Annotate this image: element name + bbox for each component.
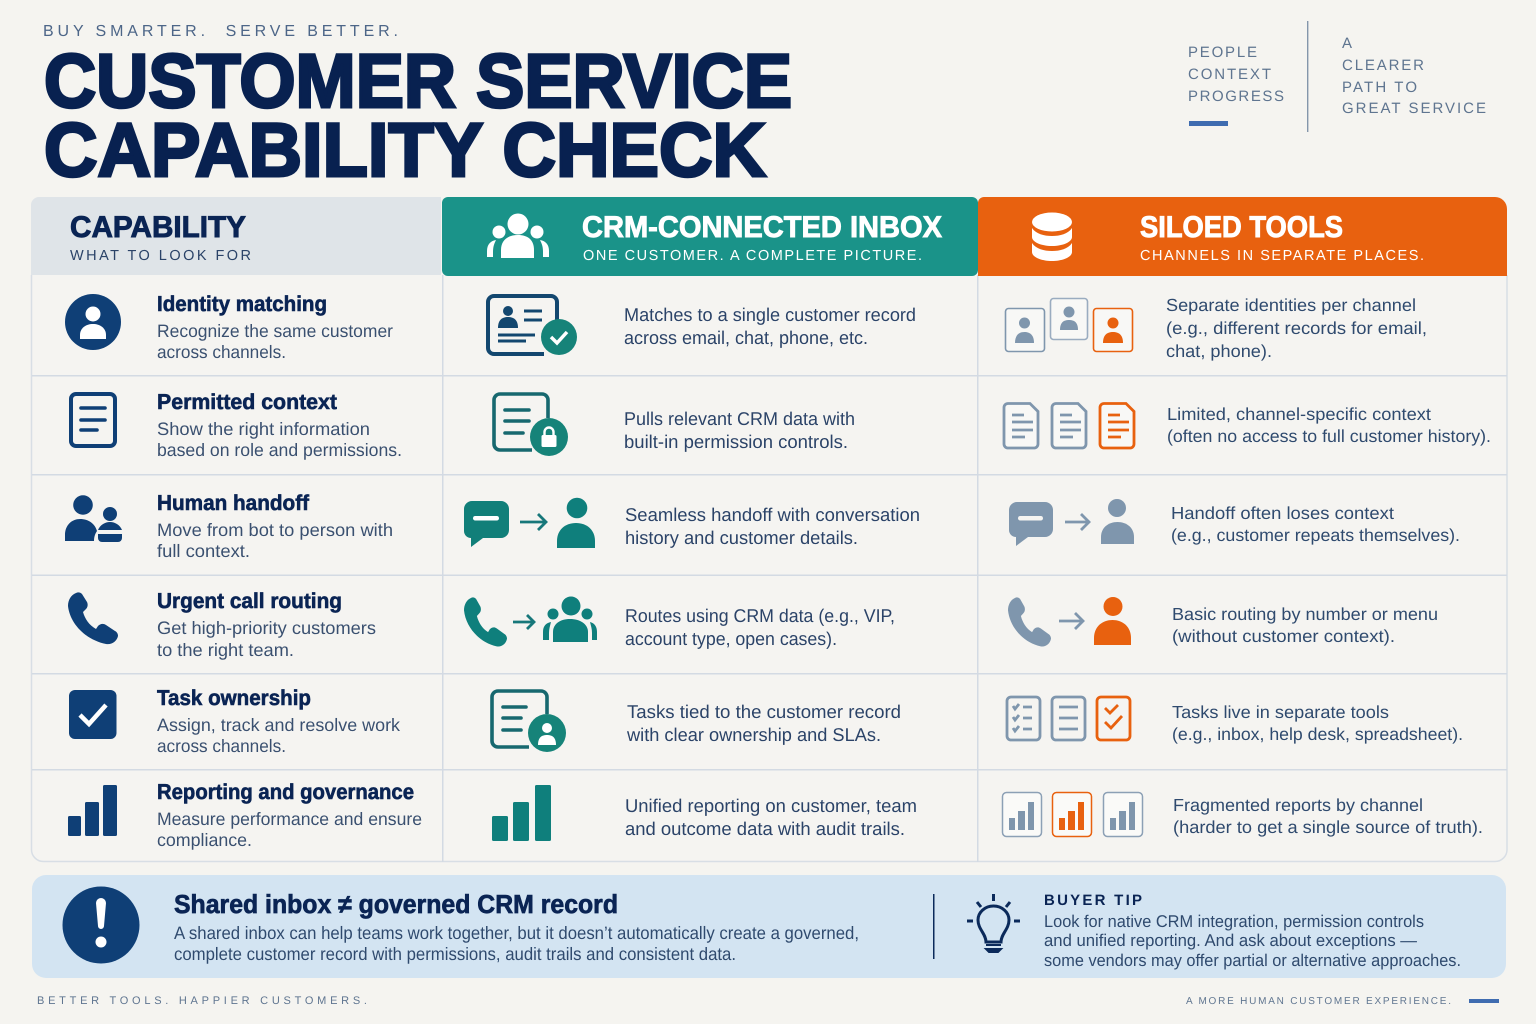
capability text: human handoff: full context. (157, 541, 250, 561)
siloed text: identity: Separate identities per channel (1166, 295, 1416, 315)
siloed text: handoff: (e.g., customer repeats themselves). (1171, 525, 1460, 545)
buyer tip: BUYER TIP (1044, 892, 1142, 909)
buyer tip: Look for native CRM integration, permission controls (1044, 912, 1424, 931)
icon: bars navy (68, 785, 117, 836)
icon: chat arrow person grey (1009, 499, 1134, 546)
icon: three separate documents (1004, 404, 1134, 448)
icon: document with owner (492, 691, 566, 752)
siloed text: task: (e.g., inbox, help desk, spreadsheet). (1172, 724, 1463, 744)
footer right: A MORE HUMAN CUSTOMER EXPERIENCE. (1186, 996, 1451, 1007)
CRM text: handoff (625, 504, 920, 548)
row: human handoff (65, 491, 1460, 561)
icon: person in circle (65, 294, 121, 350)
column header: CRM-connected inbox (442, 197, 978, 276)
CRM text: task: Tasks tied to the customer record (627, 701, 901, 722)
column header: capability: WHAT TO LOOK FOR (70, 248, 251, 264)
title: CUSTOMER SERVICE (44, 39, 792, 124)
siloed text: reporting: (harder to get a single source of truth). (1173, 817, 1483, 837)
siloed text: routing: Basic routing by number or menu (1172, 604, 1438, 624)
CRM text: routing (625, 605, 895, 649)
icon: phone arrow team teal (464, 596, 597, 647)
CRM text: reporting (625, 795, 917, 839)
icon: document (71, 394, 115, 446)
siloed text: routing: (without customer context). (1172, 626, 1395, 646)
siloed text: handoff: Handoff often loses context (1171, 503, 1394, 523)
capability text: permitted context: based on role and permissions. (157, 440, 402, 460)
capability text: human handoff: Move from bot to person with (157, 520, 393, 540)
capability text: urgent call routing (157, 589, 376, 660)
capability text: urgent call routing: Urgent call routing (157, 589, 342, 613)
CRM text: task (626, 701, 901, 745)
siloed text: identity (1166, 295, 1427, 361)
icon: document with lock (494, 394, 568, 456)
siloed text: permitted: Limited, channel-specific context (1167, 404, 1431, 424)
row: urgent call routing (68, 589, 1438, 660)
siloed text: routing (1172, 604, 1438, 646)
capability text: human handoff (157, 491, 393, 561)
row: permitted context (71, 390, 1491, 460)
CRM text: permitted (624, 408, 855, 452)
callout heading: Shared inbox ≠ governed CRM record (174, 889, 618, 919)
capability text: reporting: Reporting and governance (157, 780, 414, 804)
siloed text: reporting: Fragmented reports by channel (1173, 795, 1423, 815)
icon: chat arrow person teal (464, 498, 595, 548)
icon: two people (65, 495, 122, 542)
column header: CRM-connected inbox: ONE CUSTOMER. A COMPLETE PICTURE. (583, 248, 922, 264)
top right motto: a clearer path: GREAT SERVICE (1342, 100, 1486, 117)
capability text: permitted context (157, 390, 402, 460)
column header: capability (31, 197, 441, 275)
top right motto: a clearer path (1342, 35, 1486, 117)
siloed text: identity: (e.g., different records for email, (1166, 318, 1427, 338)
title (44, 39, 792, 193)
icon: phone navy (68, 592, 118, 644)
CRM text: routing: Routes using CRM data (e.g., VIP, (625, 605, 895, 626)
callout text: A shared inbox can help teams work together, but it doesn’t automatically create a governed, (174, 923, 859, 943)
CRM text: routing: account type, open cases). (625, 628, 837, 649)
icon: three report cards (1002, 792, 1142, 836)
icon: database (1032, 212, 1072, 261)
column header: siloed tools: CHANNELS IN SEPARATE PLACES. (1140, 248, 1424, 264)
capability text: task ownership: Assign, track and resolve work (157, 715, 401, 735)
top right motto: a clearer path: A (1342, 35, 1352, 52)
capability text: urgent call routing: to the right team. (157, 640, 294, 660)
title: CAPABILITY CHECK (44, 108, 766, 193)
siloed text: permitted (1167, 404, 1491, 446)
column header: capability: CAPABILITY (70, 211, 246, 244)
top right motto: people context progress: PROGRESS (1188, 88, 1284, 105)
top right motto: a clearer path: CLEARER (1342, 57, 1424, 74)
top right motto: a clearer path: PATH TO (1342, 79, 1417, 96)
CRM text: identity: Matches to a single customer record (624, 304, 916, 325)
icon: checkbox (69, 690, 116, 739)
icon: three separate ID cards (1006, 298, 1132, 352)
CRM text: handoff: history and customer details. (625, 527, 858, 548)
column header: siloed tools (978, 197, 1507, 276)
top right motto: people context progress: PEOPLE (1188, 44, 1257, 61)
capability text: reporting: compliance. (157, 830, 252, 850)
panel: shared inbox callout (32, 875, 1506, 978)
CRM text: reporting: Unified reporting on customer, team (625, 795, 917, 816)
footer left: BETTER TOOLS. HAPPIER CUSTOMERS. (37, 995, 367, 1007)
column header: CRM-connected inbox: CRM-CONNECTED INBOX (582, 211, 942, 244)
siloed text: task (1172, 702, 1463, 744)
siloed text: identity: chat, phone). (1166, 341, 1272, 361)
row: identity matching (65, 292, 1427, 362)
icon: exclamation (62, 886, 140, 964)
capability text: task ownership: across channels. (157, 736, 286, 756)
capability text: reporting (157, 780, 422, 850)
row: reporting and governance (68, 780, 1483, 850)
callout text (174, 923, 859, 964)
row: task ownership (69, 686, 1463, 756)
capability text: human handoff: Human handoff (157, 491, 310, 515)
CRM text: task: with clear ownership and SLAs. (626, 724, 881, 745)
buyer tip (1044, 892, 1461, 970)
column header: siloed tools: SILOED TOOLS (1140, 211, 1343, 244)
icon: lightbulb (967, 894, 1020, 952)
top right motto: people context progress: CONTEXT (1188, 66, 1271, 83)
icon: bars teal (492, 785, 551, 841)
buyer tip: and unified reporting. And ask about exceptions — (1044, 931, 1417, 950)
eyebrow tagline: BUY SMARTER. SERVE BETTER. (43, 23, 398, 40)
siloed text: reporting (1173, 795, 1483, 837)
capability text: task ownership: Task ownership (157, 686, 311, 710)
capability text: permitted context: Show the right information (157, 419, 370, 439)
icon: three task lists (1007, 697, 1130, 740)
siloed text: permitted: (often no access to full customer history). (1167, 426, 1491, 446)
CRM text: reporting: and outcome data with audit trails. (625, 818, 905, 839)
callout text: complete customer record with permissions, audit trails and consistent data. (174, 944, 736, 964)
siloed text: task: Tasks live in separate tools (1172, 702, 1389, 722)
capability text: task ownership (157, 686, 401, 756)
CRM text: permitted: built-in permission controls. (624, 431, 848, 452)
top right motto: people context progress (1188, 44, 1284, 126)
CRM text: handoff: Seamless handoff with conversation (625, 504, 920, 525)
capability text: identity matching: Recognize the same customer (157, 321, 393, 341)
capability text: urgent call routing: Get high-priority customers (157, 618, 376, 638)
CRM text: identity: across email, chat, phone, etc. (624, 327, 868, 348)
CRM text: identity (624, 304, 916, 348)
capability text: identity matching (157, 292, 393, 362)
capability text: identity matching: across channels. (157, 342, 286, 362)
buyer tip: some vendors may offer partial or alternative approaches. (1044, 951, 1461, 970)
capability text: permitted context: Permitted context (157, 390, 337, 414)
capability text: identity matching: Identity matching (157, 292, 327, 316)
siloed text: handoff (1171, 503, 1460, 545)
icon: group of people (487, 214, 549, 258)
icon: ID card with check (488, 296, 577, 355)
CRM text: permitted: Pulls relevant CRM data with (624, 408, 855, 429)
icon: phone arrow person orange (1008, 597, 1131, 647)
panel: comparison table frame (31, 275, 1507, 862)
capability text: reporting: Measure performance and ensure (157, 809, 422, 829)
